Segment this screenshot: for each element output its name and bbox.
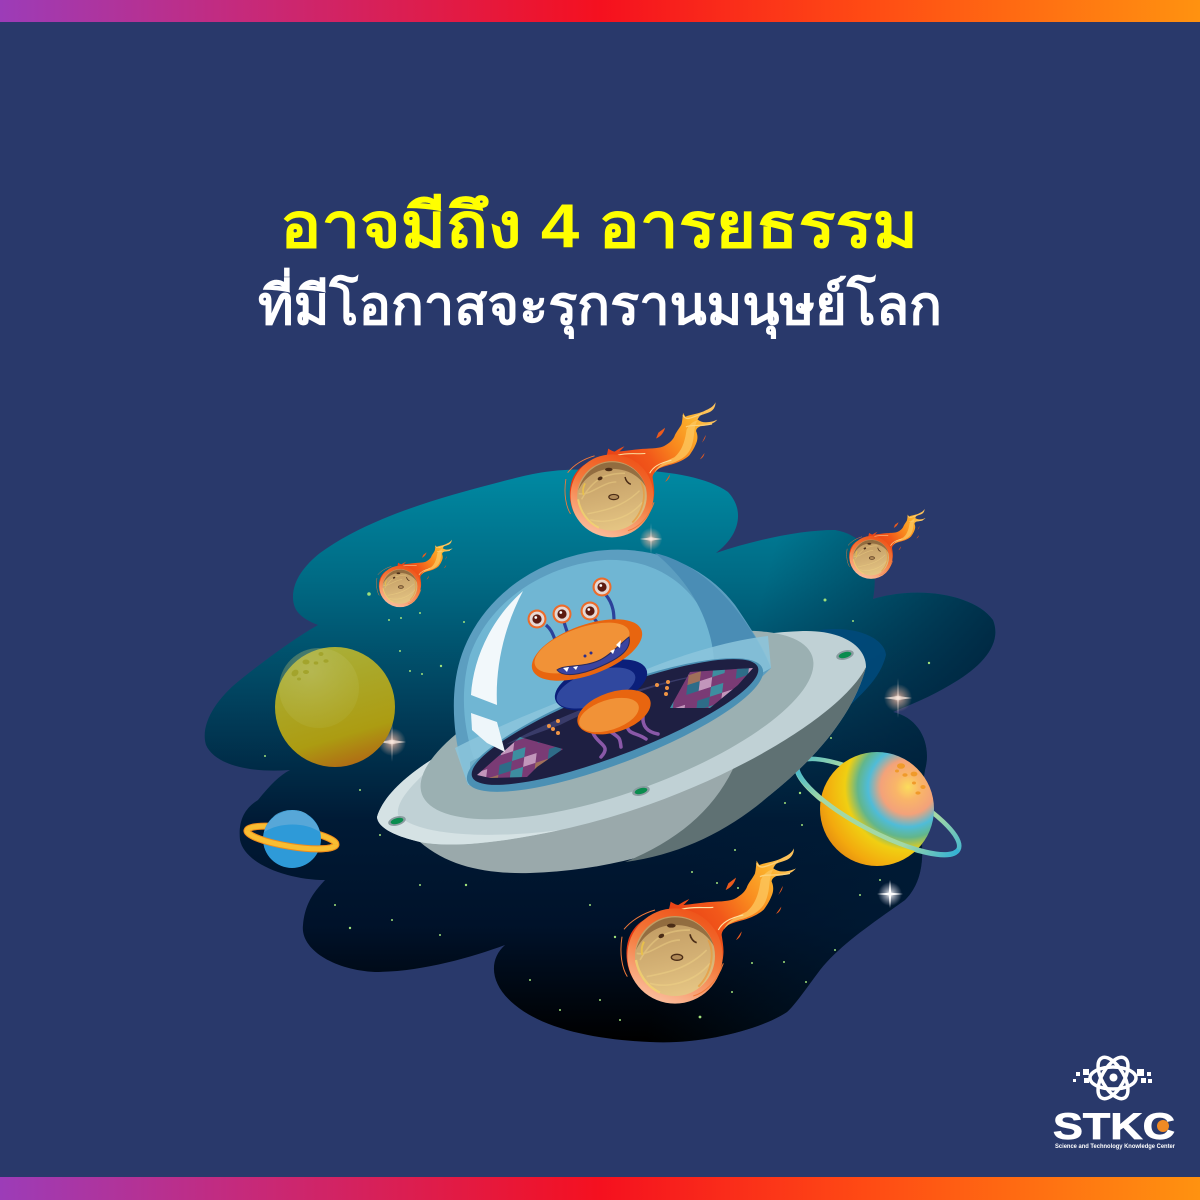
- logo pixel squares: [1073, 1069, 1152, 1083]
- flying saucer: [377, 550, 866, 873]
- planet: rainbow ringed: [786, 742, 970, 872]
- saucer top rim: [377, 631, 866, 845]
- deep blue nebula patch: [820, 629, 886, 715]
- alien head: [524, 607, 650, 693]
- space nebula blob: [205, 470, 995, 1042]
- alien stalks: [546, 595, 614, 642]
- logo orange dot: [1157, 1120, 1169, 1132]
- orange deck dots: [547, 680, 670, 735]
- alien eyes: [528, 610, 546, 628]
- ring front: [247, 830, 336, 849]
- dome highlight upper: [471, 591, 523, 705]
- meteor: small right: [847, 509, 925, 579]
- planet sphere: [263, 810, 321, 868]
- title: line 1: อาจมีถึง 4 อารยธรรม: [280, 192, 918, 261]
- logo: STKC: [1053, 1053, 1176, 1150]
- saucer hull shadow: [625, 667, 866, 862]
- deck pattern left: [477, 737, 563, 778]
- ring back: [246, 822, 337, 853]
- meteor: large bottom: [621, 848, 796, 1004]
- sparkle star top: [640, 523, 662, 555]
- logo atom icon: [1090, 1053, 1136, 1103]
- sparkle star lower right: [877, 880, 903, 908]
- alien lower body: [572, 681, 656, 743]
- glass dome: [454, 550, 771, 786]
- meteor: small left: [376, 540, 453, 607]
- logo caption: Science and Technology Knowledge Center: [1055, 1144, 1176, 1150]
- title: line 2: ที่มีโอกาสจะรุกรานมนุษย์โลก: [258, 267, 942, 340]
- saucer inner ring: [399, 592, 835, 858]
- planet: yellow: [275, 647, 395, 767]
- bottom gradient band: [0, 1177, 1200, 1200]
- alien: [524, 578, 658, 757]
- saucer deck: [454, 633, 776, 817]
- planet: blue ringed: [246, 810, 337, 868]
- alien legs: [593, 716, 658, 757]
- saucer lower hull: [420, 667, 866, 873]
- alien body: [549, 649, 653, 721]
- top gradient band: [0, 0, 1200, 22]
- deck pattern right: [670, 668, 753, 708]
- meteor: top: [565, 402, 717, 537]
- logo wordmark: STKC: [1053, 1106, 1175, 1147]
- background stars: [264, 592, 930, 1021]
- sparkle star left: [378, 722, 406, 762]
- dome highlight lower: [471, 713, 505, 752]
- sparkle star right: [884, 678, 912, 718]
- window lights: [387, 648, 855, 828]
